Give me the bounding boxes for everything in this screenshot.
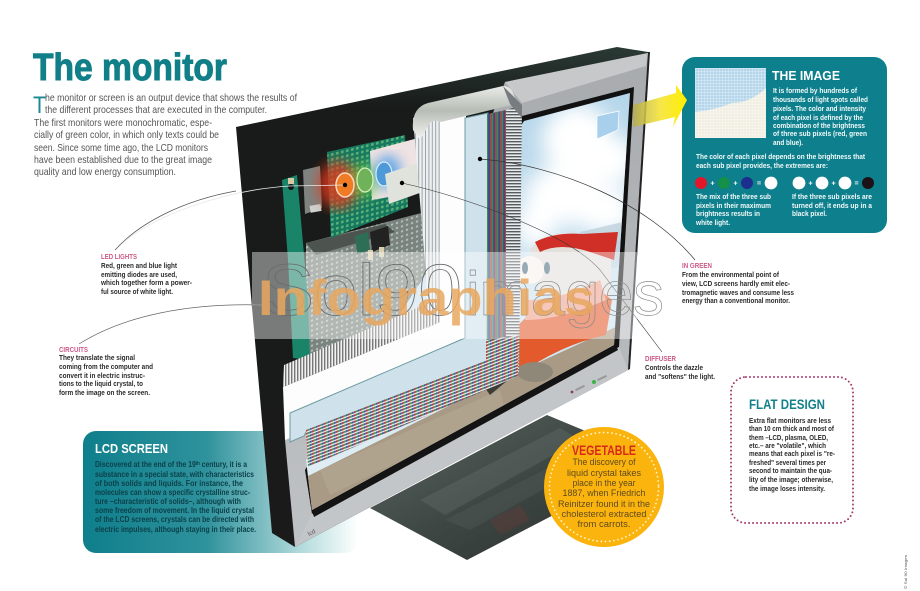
screen frame: [305, 87, 634, 514]
text: LCD screen description: electric impulses, although staying in their place.: [95, 525, 256, 534]
car: [478, 232, 618, 395]
layer: comb vertical strip: [413, 118, 440, 328]
callout: diffuser: DIFFUSER: [645, 354, 677, 363]
text: black pixel: If the three sub pixels are: [792, 192, 872, 201]
text: LCD screen description: of the LCD screens, crystals can be directed with: [95, 515, 254, 524]
arrow: pixel to image panel: [633, 85, 687, 127]
LED red: [336, 173, 354, 197]
text: flat design: second to maintain the qua-: [749, 466, 832, 475]
text: pixels: thousands of light spots called: [773, 95, 868, 104]
text: flat design: Extra flat monitors are less: [749, 416, 831, 425]
intro text: quality and low energy consumption.: [34, 167, 176, 178]
text: flat design: them –LCD, plasma, OLED,: [749, 433, 828, 442]
text: white light: white light.: [695, 218, 730, 227]
intro text: he monitor or screen is an output device that shows the results of: [45, 93, 297, 104]
text: white light: brightness results in: [696, 209, 760, 218]
LED glow: [318, 155, 401, 209]
pixel zoom window: [597, 111, 619, 139]
text: flat design: freshed" several times per: [749, 458, 826, 467]
panel: flat design: [731, 377, 853, 523]
color equation: turned off: +: [808, 180, 813, 188]
LED blue: [376, 162, 392, 186]
callout: circuits: coming from the computer and: [59, 362, 153, 371]
drop cap: T: [33, 92, 46, 119]
text: white light: [695, 192, 771, 227]
watermark orange text: Infographias: [258, 270, 595, 326]
text: black pixel: turned off, it ends up in a: [792, 201, 873, 210]
text: vegetable fact: The discovery of: [572, 457, 636, 468]
text: flat design: the image loses intensity.: [749, 484, 825, 493]
text: color depends: [696, 152, 865, 170]
callout: diffuser: [645, 354, 715, 381]
text: pixels: of three sub pixels (red, green: [773, 129, 867, 138]
callout: LED lights: which together form a power-: [100, 278, 192, 287]
text: black pixel: black pixel.: [792, 209, 827, 218]
leader lines: [79, 157, 695, 352]
watermark outlined text 2: images: [466, 260, 664, 329]
heading: vegetable: VEGETABLE: [572, 443, 636, 458]
callout: circuits: form the image on the screen.: [59, 388, 150, 397]
panel: the image: [682, 57, 887, 233]
intro text: seen. Since some time ago, the LCD monitors: [34, 143, 208, 154]
color equation: full brightness: [695, 177, 777, 189]
small vertical circuit board: [282, 175, 310, 360]
text: flat design: etc.– are "volatile", which: [749, 441, 826, 450]
layer: pixel strip lower: [306, 335, 519, 467]
text: LCD screen description: some freedom of movement. In the liquid crystal: [95, 506, 254, 515]
panel: LCD screen: [83, 431, 358, 553]
text: LCD screen description: Discovered at the end of the 19ᵗʰ century, it is a: [95, 460, 247, 469]
intro text: have been established due to the great image: [34, 155, 212, 166]
layer: white diffuser sheet: [283, 114, 466, 440]
display layers: [283, 86, 522, 467]
text: vegetable fact: cholesterol extracted: [562, 509, 646, 520]
text: color depends: The color of each pixel depends on the brightness that: [696, 152, 865, 161]
callout: in green: From the environmental point of: [682, 270, 779, 279]
text: pixels: pixels. The color and intensity: [773, 104, 867, 113]
color equation: full brightness: =: [757, 180, 761, 188]
credit: © Sol 90 Images: [903, 555, 908, 589]
text: vegetable fact: place in the year: [572, 478, 636, 489]
color equation: full brightness: +: [710, 180, 715, 188]
text: LCD screen description: molecules can show a specific crystalline struc-: [95, 488, 250, 497]
callout: LED lights: [100, 252, 192, 296]
leader: circuits: [79, 305, 262, 344]
callout: in green: energy than a conventional monitor.: [682, 296, 790, 305]
text: black pixel: [792, 192, 873, 218]
callout: in green: view, LCD screens hardly emit elec-: [682, 279, 790, 288]
layer: polarizing blue sheet: [290, 113, 488, 442]
callout: in green: [682, 261, 794, 305]
text: white light: The mix of the three sub: [696, 192, 771, 201]
monitor illustration: [236, 47, 650, 560]
LED back board: [327, 135, 408, 238]
intro text: cially of green color, in which only texts could be: [34, 130, 219, 141]
text: pixels: and blue).: [773, 138, 803, 147]
LED green: [357, 168, 373, 192]
text: LCD screen description: substance in a special state, with characteristics: [95, 470, 254, 479]
watermark outlined text: Sol90: [262, 251, 462, 331]
layer: curved top band: [413, 86, 516, 140]
text: flat design: means that each pixel is "re-: [749, 449, 835, 458]
intro text: The first monitors were monochromatic, espe-: [34, 118, 212, 129]
text: pixels: [773, 86, 868, 147]
transparent light guide: [303, 166, 322, 214]
screen picture: [300, 85, 640, 520]
heading: the image: THE IMAGE: [772, 68, 840, 83]
callout: circuits: tions to the liquid crystal, to: [59, 379, 143, 388]
text: vegetable fact: Reinitzer found it in the: [558, 499, 650, 510]
color equation: turned off: +: [831, 180, 836, 188]
layer: pixel strip vertical: [487, 105, 522, 377]
text: vegetable fact: liquid crystal takes: [567, 468, 641, 479]
lower circuit board: [306, 212, 425, 372]
text: LCD screen description: [95, 460, 256, 534]
text: pixels: combination of the brightness: [773, 121, 865, 130]
callout: in green: tromagnetic waves and consume less: [682, 288, 794, 297]
diffuser block: [385, 163, 428, 204]
anchor dots: [343, 157, 482, 187]
callout: diffuser: and "softens" the light.: [645, 372, 715, 381]
text: flat design: [749, 416, 835, 493]
monitor back casing: [236, 47, 648, 547]
leader: diffuser: [402, 183, 662, 352]
color equation: full brightness: +: [733, 180, 738, 188]
text: vegetable fact: 1887, when Friedrich: [562, 488, 646, 499]
leader: LED lights: [115, 185, 345, 250]
color equation: turned off: [793, 177, 874, 189]
text: white light: pixels in their maximum: [696, 201, 771, 210]
bezel front lower highlight: [296, 347, 628, 546]
silver front bezel: [285, 53, 648, 547]
brand mark: lcd: [307, 529, 317, 538]
panel: vegetable badge: [544, 427, 664, 547]
intro text: the different processes that are executed in the computer.: [45, 105, 267, 116]
intro text: [33, 92, 297, 178]
text: flat design: lity of the image; otherwise,: [749, 475, 833, 484]
callout: circuits: convert it in electric instruc-: [59, 371, 145, 380]
callout: circuits: They translate the signal: [59, 353, 135, 362]
text: LCD screen description: of both solids and liquids. For instance, the: [95, 479, 243, 488]
text: pixels: It is formed by hundreds of: [773, 86, 857, 95]
heading: flat design: FLAT DESIGN: [749, 397, 825, 412]
components: [370, 226, 390, 252]
text: vegetable fact: [558, 457, 650, 530]
leader: in green: [480, 159, 695, 260]
text: flat design: than 10 cm thick and most of: [749, 424, 834, 433]
callout: circuits: [59, 345, 153, 397]
heading: LCD screen: LCD SCREEN: [95, 441, 168, 456]
callout: LED lights: ful source of white light.: [101, 287, 173, 296]
color equation: turned off: =: [854, 180, 859, 188]
callout: LED lights: Red, green and blue light: [101, 261, 177, 270]
layer: comb lower strip: [283, 298, 440, 387]
text: vegetable fact: from carrots.: [578, 519, 630, 530]
monitor stand: [370, 415, 640, 560]
watermark: [252, 251, 664, 339]
text: color depends: each sub pixel provides, the extremes are:: [696, 161, 828, 170]
callout: diffuser: Controls the dazzle: [645, 363, 703, 372]
circuits and LED interior: [282, 135, 428, 372]
watermark band: [252, 252, 637, 339]
title: The monitor: [33, 47, 227, 89]
callout: LED lights: emitting diodes are used,: [101, 270, 177, 279]
floor: [308, 327, 616, 510]
text: pixels: of each pixel is defined by the: [773, 113, 863, 122]
callout: circuits: CIRCUITS: [59, 345, 88, 354]
callout: LED lights: LED LIGHTS: [101, 252, 137, 261]
pink light sheet: [370, 138, 428, 200]
callout: in green: IN GREEN: [682, 261, 712, 270]
pixel thumbnail: [695, 68, 766, 138]
status buttons: [571, 375, 607, 393]
text: LCD screen description: ture –characteristic of solids–, although with: [95, 497, 241, 506]
